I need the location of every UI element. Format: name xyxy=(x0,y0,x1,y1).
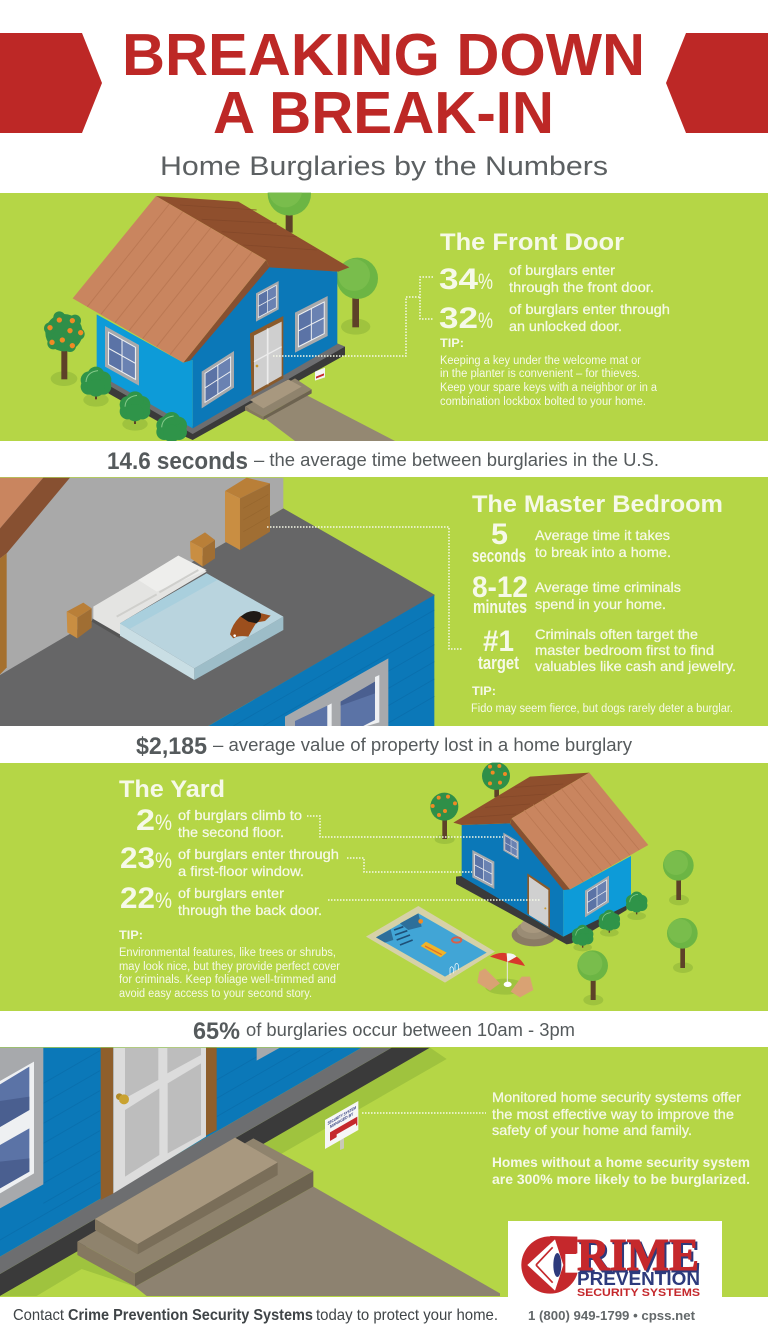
stat: 2 percent: % xyxy=(155,810,172,835)
stat: 32 percent xyxy=(439,301,670,335)
icon: dog on bed xyxy=(230,611,271,638)
foundation xyxy=(0,1048,430,1296)
floor xyxy=(0,508,435,726)
fact bar: average value: $2,185 xyxy=(136,733,207,760)
back door xyxy=(527,873,550,928)
connector lines: the yard xyxy=(307,816,540,900)
text: monitored systems: the most effective way to improve the xyxy=(492,1106,734,1122)
stat: number 1 target: #1 xyxy=(483,625,514,658)
house windows xyxy=(105,281,328,408)
security sign xyxy=(315,368,325,381)
security sign: SECURITY SYSTEM xyxy=(328,1105,356,1126)
house walls xyxy=(97,265,337,428)
front door xyxy=(101,1048,217,1200)
tip: the yard: for criminals. Keep foliage well-trimmed and xyxy=(119,974,336,986)
stat: 5 seconds: 5 xyxy=(491,518,508,551)
text: 300 percent more likely xyxy=(492,1154,750,1187)
stat: 2 percent xyxy=(136,804,302,840)
logo wordmark: RIME xyxy=(579,1231,701,1282)
stat: 8-12 minutes xyxy=(472,571,681,617)
house foundation xyxy=(456,876,627,944)
text: monitored systems xyxy=(492,1089,741,1138)
icon: dresser xyxy=(225,478,270,550)
icon: back tree xyxy=(268,192,311,233)
illustration: house and pool xyxy=(366,762,698,1005)
stat: number 1 target: target xyxy=(478,653,519,673)
text: 300 percent more likely: are 300% more likely to be burglarized. xyxy=(492,1171,750,1187)
stat: number 1 target xyxy=(478,625,736,674)
tip: front door: in the planter is convenient – for thieves. xyxy=(440,368,640,380)
tip: the yard: Environmental features, like trees or shrubs, xyxy=(119,947,336,959)
connector lines: master bedroom xyxy=(267,527,463,649)
stat: 22 percent xyxy=(120,882,322,918)
logo wordmark: SECURITY SYSTEMS xyxy=(577,1287,700,1299)
footer xyxy=(0,1297,768,1344)
fact bar: average value: – average value of property lost in a home burglary xyxy=(213,734,633,755)
icon: right nightstand xyxy=(190,532,215,567)
illustration: front door close-up xyxy=(0,1048,500,1296)
panel: the master bedroom xyxy=(0,477,768,726)
stat: 8-12 minutes: minutes xyxy=(473,597,527,617)
tip: master bedroom xyxy=(471,684,733,715)
stat: 34 percent xyxy=(439,262,654,296)
icon: swimming pool xyxy=(366,906,495,983)
stat: number 1 target: Criminals often target the xyxy=(535,626,698,642)
stat: number 1 target: valuables like cash and jewelry. xyxy=(535,658,736,674)
stat: 2 percent: of burglars climb to xyxy=(178,807,302,823)
stat: 22 percent: % xyxy=(155,888,172,913)
tip: the yard: TIP: xyxy=(119,928,143,942)
text: 300 percent more likely: Homes without a home security system xyxy=(492,1154,750,1170)
panel: the front door xyxy=(0,172,768,445)
icon: patio umbrella and chairs xyxy=(477,953,533,997)
phone and website: 1 (800) 949-1799 • cpss.net xyxy=(528,1308,696,1323)
icon: bushes xyxy=(81,367,187,445)
illustration: blue house front xyxy=(44,172,395,445)
fact bar: 65 percent: 65% xyxy=(193,1018,240,1045)
stat: 34 percent: 34 xyxy=(439,263,478,296)
tip: master bedroom: Fido may seem fierce, but dogs rarely deter a burglar. xyxy=(471,703,733,715)
icon: tree front xyxy=(577,950,608,1005)
stat: 23 percent: a first-floor window. xyxy=(178,863,304,879)
icon: orange tree left xyxy=(430,793,458,844)
stat: 8-12 minutes: Average time criminals xyxy=(535,579,681,595)
walkway xyxy=(135,1187,500,1296)
back wall xyxy=(0,478,283,677)
fact bar: 14.6 seconds xyxy=(0,441,768,477)
blue exterior wall xyxy=(208,595,434,726)
stat: 32 percent: an unlocked door. xyxy=(509,318,622,334)
fact bar: 14.6 seconds: – the average time between burglaries in the U.S. xyxy=(254,449,659,470)
subtitle: Home Burglaries by the Numbers xyxy=(160,151,608,181)
stat: 22 percent: 22 xyxy=(120,882,155,915)
house windows xyxy=(472,833,609,917)
icon: tree lower right xyxy=(667,918,698,973)
tip: front door: Keep your spare keys with a neighbor or in a xyxy=(440,382,658,394)
text: monitored systems: Monitored home security systems offer xyxy=(492,1089,741,1105)
fact bar: average value xyxy=(0,726,768,763)
fact bar: 65 percent xyxy=(0,1011,768,1047)
grass shadow xyxy=(0,1048,447,1296)
icon: right tree xyxy=(337,258,378,335)
tip: front door: TIP: xyxy=(440,336,464,350)
tip: front door: Keeping a key under the welcome mat or xyxy=(440,355,641,367)
stat: 23 percent: % xyxy=(155,848,172,873)
title xyxy=(122,22,645,146)
tip: front door: combination lockbox bolted to your home. xyxy=(440,396,646,408)
fact bar: 65 percent: of burglaries occur between 10am - 3pm xyxy=(246,1019,575,1040)
right red banner xyxy=(666,33,768,133)
stat: 34 percent: through the front door. xyxy=(509,279,654,295)
text: monitored systems: safety of your home and family. xyxy=(492,1122,692,1138)
illustration: bedroom cutaway xyxy=(0,478,435,726)
stat: 32 percent: of burglars enter through xyxy=(509,301,670,317)
stat: 5 seconds xyxy=(472,518,671,566)
stat: 34 percent: of burglars enter xyxy=(509,262,615,278)
heading: the yard: The Yard xyxy=(119,776,225,803)
connector lines: front door xyxy=(273,277,433,356)
logo wordmark: RIME xyxy=(577,1229,699,1280)
tip: front door xyxy=(440,336,658,408)
icon: orange tree xyxy=(44,311,85,386)
stat: 5 seconds: Average time it takes xyxy=(535,527,670,543)
connector line: sign to text xyxy=(362,1112,486,1114)
stat: 8-12 minutes: 8-12 xyxy=(472,571,528,604)
icon: bushes xyxy=(572,891,647,951)
tip: the yard xyxy=(119,928,340,1000)
title: A BREAK-IN xyxy=(213,80,554,146)
panel: the yard xyxy=(0,762,768,1011)
stat: 22 percent: of burglars enter xyxy=(178,885,284,901)
stat: 8-12 minutes: spend in your home. xyxy=(535,596,666,612)
logo eye mark xyxy=(521,1236,580,1294)
security sign xyxy=(325,1101,358,1150)
tip: master bedroom: TIP: xyxy=(472,684,496,698)
stat: 2 percent: 2 xyxy=(136,804,155,837)
security sign: MANAGED BY xyxy=(330,1111,354,1129)
heading: the master bedroom: The Master Bedroom xyxy=(472,491,723,518)
tip: the yard: may look nice, but they provide perfect cover xyxy=(119,961,340,973)
front door xyxy=(250,316,283,396)
icon: orange tree back xyxy=(482,762,510,797)
heading: the front door: The Front Door xyxy=(440,229,624,256)
icon: bed xyxy=(92,556,283,680)
entry steps xyxy=(77,1138,313,1287)
logo wordmark: PREVENTION xyxy=(577,1269,700,1289)
stat: 23 percent: 23 xyxy=(120,842,155,875)
title: BREAKING DOWN xyxy=(122,22,645,88)
stat: 2 percent: the second floor. xyxy=(178,824,284,840)
header background xyxy=(0,0,768,193)
icon: round steps xyxy=(512,921,556,946)
window xyxy=(285,658,388,726)
contact line: Contact xyxy=(13,1307,65,1324)
stat: 23 percent xyxy=(120,842,339,879)
cut roof section xyxy=(0,478,70,674)
stat: 5 seconds: seconds xyxy=(472,546,526,566)
blue wall xyxy=(0,1048,362,1257)
left red banner xyxy=(0,33,102,133)
contact line: Crime Prevention Security Systems xyxy=(68,1307,313,1324)
stat: 23 percent: of burglars enter through xyxy=(178,846,339,862)
contact line xyxy=(13,1307,498,1324)
tip: the yard: avoid easy access to your second story. xyxy=(119,988,312,1000)
panel: security system xyxy=(0,1047,768,1299)
icon: left nightstand xyxy=(67,603,92,638)
icon: tree upper right xyxy=(663,850,694,905)
house roof xyxy=(453,773,648,890)
stat: 32 percent: % xyxy=(478,308,493,333)
front steps xyxy=(245,378,312,420)
house walls xyxy=(462,823,631,937)
grass corner xyxy=(0,1252,147,1296)
stat: 34 percent: % xyxy=(478,269,493,294)
window xyxy=(0,1048,43,1208)
house foundation xyxy=(108,343,345,440)
logo: crime prevention security systems xyxy=(508,1221,722,1299)
stat: number 1 target: master bedroom first to find xyxy=(535,642,714,658)
stat: 22 percent: through the back door. xyxy=(178,902,322,918)
stat: 32 percent: 32 xyxy=(439,302,478,335)
house roof xyxy=(73,196,349,363)
contact line: today to protect your home. xyxy=(316,1307,498,1324)
front path xyxy=(265,393,395,441)
stat: 5 seconds: to break into a home. xyxy=(535,544,671,560)
fact bar: 14.6 seconds: 14.6 seconds xyxy=(107,448,248,475)
